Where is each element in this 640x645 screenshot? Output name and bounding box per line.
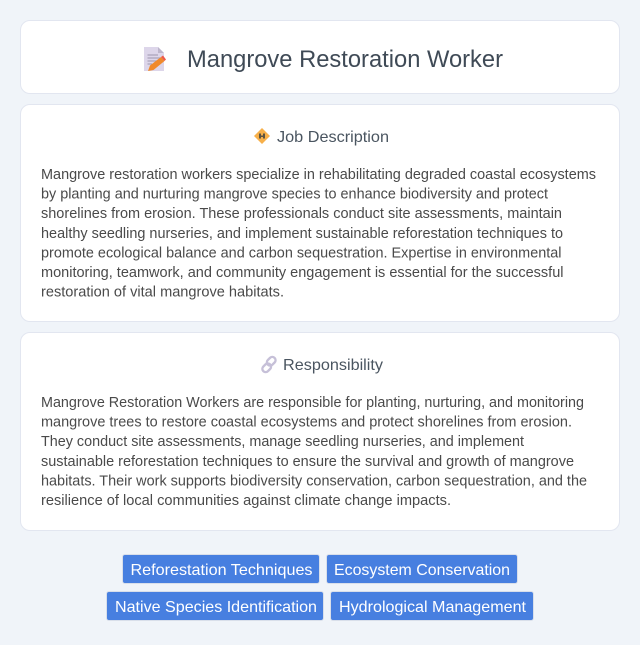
- text block: responsibility: resilience of local communities against climate change impacts.: [41, 493, 451, 509]
- text block: job description: restoration of vital mangrove habitats.: [41, 285, 284, 301]
- text block: responsibility: sustainable reforestation techniques to ensure the survival and growth of mangrove: [41, 454, 574, 470]
- text block: responsibility: [41, 395, 587, 509]
- tag: hydrological management: Hydrological Management: [339, 599, 527, 616]
- text block: job description: promote ecological balance and carbon sequestration. Expertise in environmental: [41, 245, 562, 261]
- icon: chain link: [261, 356, 277, 374]
- tag: native species identification: Native Species Identification: [115, 599, 317, 616]
- text block: job description: healthy seedling nurseries, and implement sustainable reforestation techniques to: [41, 226, 563, 242]
- text block: responsibility: They conduct site assessments, manage seedling nurseries, and implement: [41, 434, 524, 450]
- heading: job description: Job Description: [277, 129, 389, 146]
- text block: job description: [41, 167, 596, 301]
- title: Mangrove Restoration Worker: [187, 46, 503, 73]
- text block: job description: monitoring, teamwork, and community engagement is essential for the successful: [41, 265, 564, 281]
- tag: reforestation techniques: Reforestation Techniques: [130, 562, 313, 579]
- tag: reforestation techniques: [122, 554, 320, 584]
- icon: document with pencil: [144, 47, 166, 71]
- heading: responsibility: Responsibility: [283, 357, 383, 374]
- panel: job description: [20, 104, 620, 322]
- tag: ecosystem conservation: [326, 554, 518, 584]
- panel: title card: [20, 20, 620, 94]
- tag: ecosystem conservation: Ecosystem Conservation: [334, 562, 510, 579]
- text block: job description: shorelines from erosion. These professionals conduct site assessments, maintain: [41, 206, 562, 222]
- tag: native species identification: [106, 591, 324, 621]
- text block: job description: by planting and nurturing mangrove species to enhance biodiversity and protect: [41, 187, 548, 203]
- text block: responsibility: Mangrove Restoration Workers are responsible for planting, nurturing, and monitoring: [41, 395, 584, 411]
- text block: job description: Mangrove restoration workers specialize in rehabilitating degraded coastal ecosystems: [41, 167, 596, 183]
- panel: responsibility: [20, 332, 620, 531]
- text block: responsibility: habitats. Their work supports biodiversity conservation, carbon sequestration, and the: [41, 473, 587, 489]
- tag: hydrological management: [330, 591, 534, 621]
- text block: responsibility: mangrove trees to restore coastal ecosystems and protect shorelines from erosion.: [41, 415, 572, 431]
- icon: orange diamond: [254, 128, 270, 144]
